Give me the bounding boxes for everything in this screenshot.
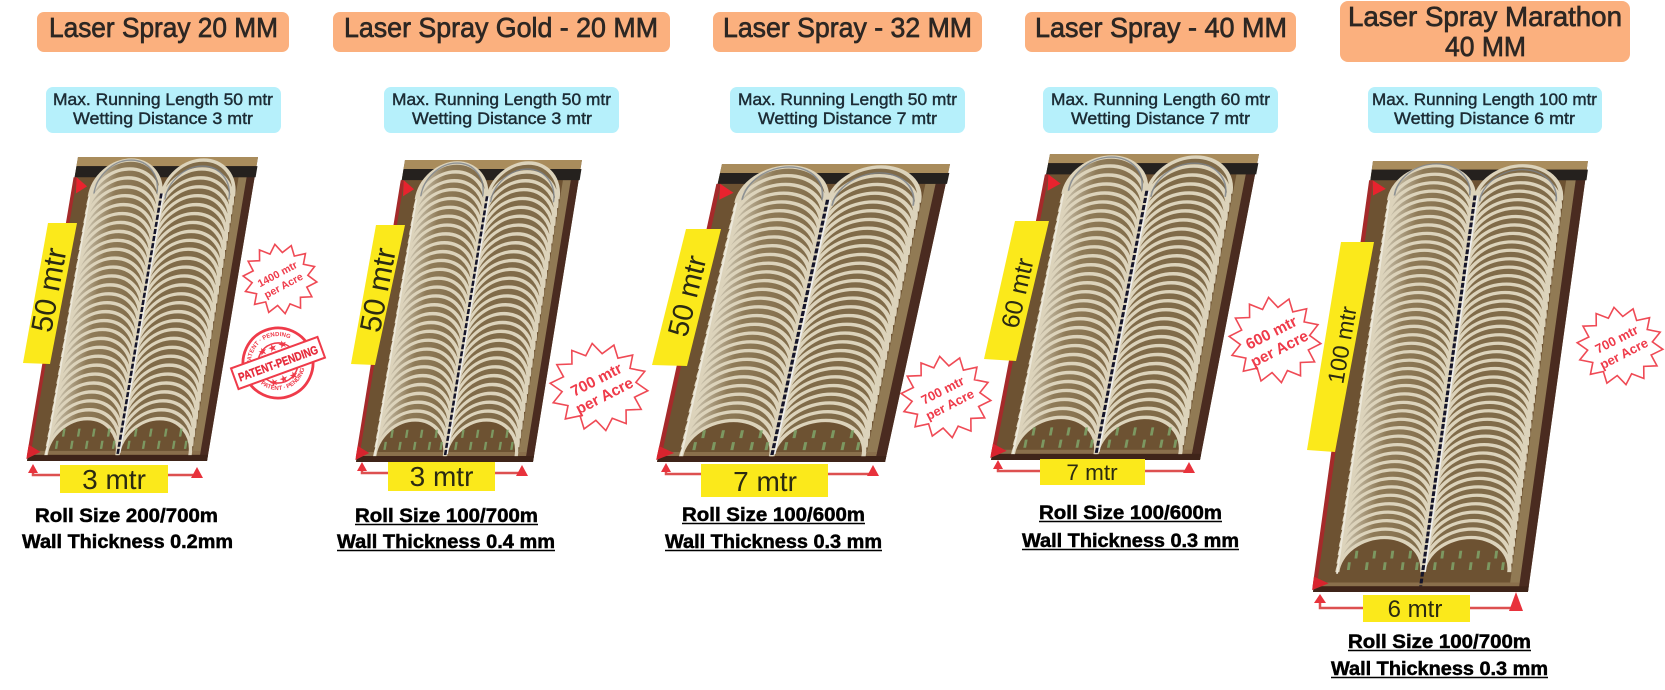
spec text: roll size and wall thickness: Roll Size 100/700m bbox=[355, 505, 538, 527]
panel: Laser Spray Gold - 20 MM bbox=[333, 12, 670, 553]
spec text: roll size and wall thickness: Wall Thickness 0.3 mm bbox=[1331, 658, 1548, 680]
width dimension: 3 mtr: 3 mtr bbox=[410, 461, 473, 492]
length label: 60 mtr bbox=[984, 221, 1049, 361]
badge: 700 mtr per Acre: 700 mtr bbox=[1593, 322, 1641, 356]
stamp: patent pending: ★ ★ ★ bbox=[268, 369, 300, 389]
badge: 700 mtr per Acre bbox=[545, 337, 653, 437]
badge: 700 mtr per Acre: 700 mtr bbox=[919, 373, 967, 407]
spec text: roll size and wall thickness bbox=[1331, 631, 1548, 680]
width dimension: 3 mtr: 3 mtr bbox=[82, 464, 146, 495]
illustration: twin spray tunnels over field bbox=[656, 164, 951, 462]
badge: 1400 mtr per Acre: 1400 mtr bbox=[256, 259, 300, 290]
spec text: roll size and wall thickness: Roll Size 100/600m bbox=[1039, 502, 1222, 524]
spec box: running length and wetting distance: Max. Running Length 50 mtr bbox=[53, 90, 273, 109]
stamp: patent pending: PATENT-PENDING bbox=[236, 343, 320, 384]
spec text: roll size and wall thickness: Wall Thickness 0.3 mm bbox=[665, 531, 882, 553]
panel: Laser Spray 20 MM bbox=[22, 12, 326, 553]
spec text: roll size and wall thickness: Roll Size 100/700m bbox=[1348, 631, 1531, 653]
stamp: patent pending: PATENT · PENDING bbox=[261, 368, 304, 390]
stamp: patent pending: PATENT · PENDING bbox=[247, 332, 290, 362]
panel: Laser Spray - 40 MM bbox=[984, 12, 1326, 552]
illustration: twin spray tunnels over field bbox=[355, 160, 583, 462]
spec box: running length and wetting distance: Wetting Distance 6 mtr bbox=[1394, 109, 1575, 128]
badge: 1400 mtr per Acre: per Acre bbox=[262, 271, 305, 301]
spec text: roll size and wall thickness: Wall Thickness 0.4 mm bbox=[337, 531, 555, 553]
width dimension: 3 mtr bbox=[28, 464, 203, 495]
heading: Laser Spray 20 MM: Laser Spray 20 MM bbox=[49, 12, 278, 43]
badge: 700 mtr per Acre bbox=[1573, 302, 1665, 390]
badge: 600 mtr per Acre: per Acre bbox=[1248, 327, 1312, 371]
length label: 50 mtr bbox=[351, 225, 405, 365]
badge: 700 mtr per Acre: per Acre bbox=[573, 374, 637, 418]
width dimension: 7 mtr: 7 mtr bbox=[733, 466, 797, 497]
spec box: running length and wetting distance: Wetting Distance 3 mtr bbox=[412, 109, 592, 128]
badge: 700 mtr per Acre bbox=[896, 351, 996, 443]
spec box: running length and wetting distance: Wetting Distance 7 mtr bbox=[758, 109, 937, 128]
spec text: roll size and wall thickness bbox=[665, 504, 882, 553]
length label: 60 mtr: 60 mtr bbox=[996, 256, 1040, 331]
heading: Laser Spray - 40 MM: Laser Spray - 40 MM bbox=[1035, 12, 1287, 43]
spec text: roll size and wall thickness: Wall Thickness 0.2mm bbox=[22, 531, 233, 553]
length label: 100 mtr: 100 mtr bbox=[1322, 304, 1362, 386]
length label: 50 mtr: 50 mtr bbox=[663, 252, 714, 340]
heading: Laser Spray Gold - 20 MM: Laser Spray Gold - 20 MM bbox=[344, 12, 658, 43]
spec box: running length and wetting distance: Max. Running Length 100 mtr bbox=[1372, 90, 1597, 109]
length label: 50 mtr bbox=[23, 223, 77, 364]
spec text: roll size and wall thickness: Wall Thickness 0.3 mm bbox=[1022, 530, 1239, 552]
heading: Laser Spray Marathon 40 MM: Laser Spray Marathon bbox=[1348, 1, 1622, 32]
spec box: running length and wetting distance bbox=[1368, 87, 1602, 133]
illustration: twin spray tunnels over field bbox=[26, 157, 259, 461]
width dimension: 7 mtr bbox=[661, 463, 879, 497]
spec box: running length and wetting distance: Wetting Distance 3 mtr bbox=[73, 109, 253, 128]
spec text: roll size and wall thickness bbox=[22, 505, 233, 553]
width dimension: 3 mtr bbox=[357, 461, 528, 492]
width dimension: 6 mtr: 6 mtr bbox=[1388, 596, 1442, 623]
stamp: patent pending bbox=[230, 326, 326, 400]
spec text: roll size and wall thickness: Roll Size 200/700m bbox=[35, 505, 218, 527]
width dimension: 6 mtr bbox=[1314, 592, 1523, 623]
stamp: patent pending: ★ ★ ★ bbox=[257, 338, 289, 358]
spec box: running length and wetting distance bbox=[384, 87, 619, 133]
panel: Laser Spray Marathon 40 MM bbox=[1307, 1, 1665, 680]
spec text: roll size and wall thickness bbox=[1022, 502, 1239, 552]
spec text: roll size and wall thickness bbox=[337, 505, 555, 553]
spec text: roll size and wall thickness: Roll Size 100/600m bbox=[682, 504, 865, 526]
width dimension: 7 mtr: 7 mtr bbox=[1066, 460, 1118, 485]
badge: 700 mtr per Acre: per Acre bbox=[1597, 335, 1651, 372]
illustration: twin spray tunnels over long field bbox=[1312, 161, 1589, 592]
spec box: running length and wetting distance: Max. Running Length 50 mtr bbox=[392, 90, 611, 109]
illustration: twin spray tunnels over field bbox=[990, 154, 1260, 460]
spec box: running length and wetting distance bbox=[46, 87, 281, 133]
spec box: running length and wetting distance: Wetting Distance 7 mtr bbox=[1071, 109, 1250, 128]
width dimension: 7 mtr bbox=[993, 459, 1195, 485]
length label: 100 mtr bbox=[1307, 242, 1374, 452]
length label: 50 mtr bbox=[652, 229, 721, 366]
heading: Laser Spray - 32 MM: Laser Spray - 32 MM bbox=[723, 12, 972, 43]
length label: 50 mtr: 50 mtr bbox=[26, 245, 73, 335]
spec box: running length and wetting distance bbox=[1043, 87, 1278, 133]
spec box: running length and wetting distance bbox=[730, 87, 965, 133]
spec box: running length and wetting distance: Max. Running Length 60 mtr bbox=[1051, 90, 1270, 109]
spec box: running length and wetting distance: Max. Running Length 50 mtr bbox=[738, 90, 957, 109]
badge: 1400 mtr per Acre bbox=[239, 240, 321, 318]
length label: 50 mtr: 50 mtr bbox=[354, 245, 403, 335]
badge: 600 mtr per Acre bbox=[1224, 292, 1326, 388]
badge: 600 mtr per Acre: 600 mtr bbox=[1243, 313, 1300, 353]
badge: 700 mtr per Acre: 700 mtr bbox=[568, 360, 625, 400]
badge: 700 mtr per Acre: per Acre bbox=[923, 386, 977, 423]
heading: Laser Spray Marathon 40 MM: 40 MM bbox=[1445, 31, 1526, 62]
heading: Laser Spray Marathon 40 MM bbox=[1340, 1, 1630, 62]
panel: Laser Spray - 32 MM bbox=[652, 12, 996, 553]
